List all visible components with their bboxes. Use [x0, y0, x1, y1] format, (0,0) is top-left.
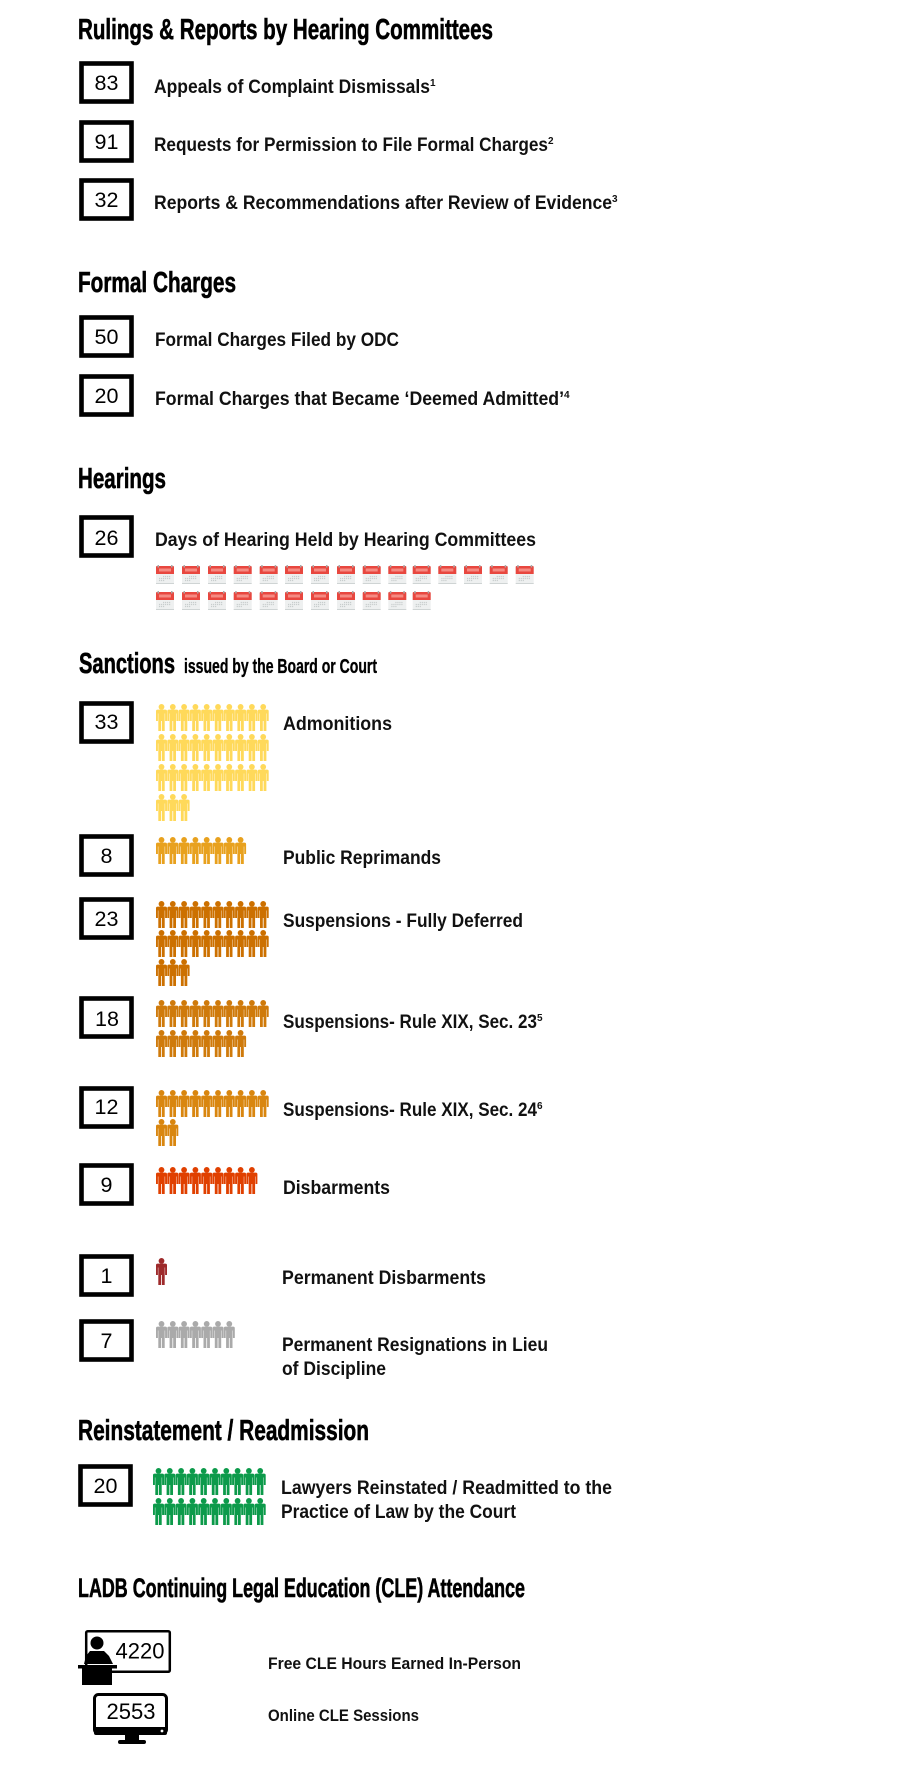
stat: appeals of complaint dismissals	[82, 64, 436, 102]
stat: requests for permission: 2	[548, 136, 554, 147]
stat: permanent disbarments	[82, 1256, 486, 1294]
icons: calendars	[156, 565, 534, 610]
stat: suspensions fully deferred: 23	[95, 907, 118, 931]
stat: admonitions: 33	[95, 710, 118, 734]
stat: appeals of complaint dismissals: 1	[430, 78, 436, 89]
stat: lawyers reinstated: Lawyers Reinstated / Readmitted to the	[281, 1478, 612, 1499]
stat: suspensions rule XIX sec 23: 5	[537, 1013, 543, 1024]
stat: permanent resignations: 7	[101, 1329, 112, 1353]
section: hearings	[78, 463, 536, 610]
stat: suspensions rule XIX sec 23: 18	[95, 1007, 119, 1031]
stat: deemed admitted: Formal Charges that Became ‘Deemed Admitted’	[155, 389, 564, 410]
icons: deferred suspension people	[156, 901, 269, 986]
icons: admonitions people	[156, 704, 269, 821]
stat: online CLE sessions: Online CLE Sessions	[268, 1706, 419, 1725]
stat: disbarments	[82, 1166, 390, 1204]
stat: appeals of complaint dismissals: 83	[95, 71, 118, 95]
icons: sec 23 people	[156, 1000, 269, 1057]
icons: sec 24 people	[156, 1090, 269, 1146]
stat: appeals of complaint dismissals: Appeals of Complaint Dismissals	[154, 77, 430, 98]
stat: public reprimands	[82, 836, 441, 874]
stat: requests for permission	[82, 122, 554, 160]
heading: rulings and reports: Rulings & Reports by Hearing Committees	[78, 14, 493, 46]
stat: disbarments: Disbarments	[283, 1178, 390, 1199]
stat: lawyers reinstated	[80, 1466, 612, 1525]
stat: days of hearing: 26	[95, 526, 118, 550]
icon: monitor: 2553	[107, 1699, 155, 1724]
heading: reinstatement: Reinstatement / Readmission	[78, 1415, 369, 1447]
stat: public reprimands: Public Reprimands	[283, 848, 441, 869]
stat: reports and recommendations: 32	[95, 188, 118, 212]
stat: lawyers reinstated: Practice of Law by the Court	[281, 1502, 517, 1523]
icon: speaker at podium with board	[78, 1631, 170, 1685]
stat: in-person CLE hours: Free CLE Hours Earned In-Person	[268, 1654, 521, 1673]
stat: deemed admitted	[82, 376, 570, 414]
stat: permanent disbarments: Permanent Disbarments	[282, 1268, 486, 1289]
section: formal charges	[78, 267, 570, 414]
stat: public reprimands: 8	[101, 844, 113, 868]
stat: reports and recommendations: 3	[612, 194, 618, 205]
stat: lawyers reinstated: 20	[94, 1474, 117, 1498]
stat: formal charges filed: 50	[95, 325, 118, 349]
icons: reprimand people	[156, 837, 246, 864]
stat: suspensions fully deferred: Suspensions - Fully Deferred	[283, 911, 523, 932]
stat: reports and recommendations	[82, 180, 618, 218]
section: reinstatement	[78, 1415, 612, 1525]
stat: online CLE sessions	[94, 1694, 419, 1744]
icons: resignation people	[156, 1321, 235, 1348]
stat: in-person CLE hours	[78, 1631, 521, 1685]
stat: disbarments: 9	[101, 1173, 112, 1197]
icon: monitor	[94, 1694, 167, 1744]
section: rulings and reports	[78, 14, 618, 218]
stat: admonitions: Admonitions	[283, 714, 392, 735]
stat: formal charges filed	[82, 318, 399, 356]
stat: suspensions rule XIX sec 24	[82, 1088, 543, 1146]
heading: hearings: Hearings	[78, 463, 166, 495]
stat: days of hearing: Days of Hearing Held by Hearing Committees	[155, 530, 536, 551]
icons: disbarment people	[156, 1167, 257, 1194]
stat: suspensions rule XIX sec 24: 6	[537, 1101, 543, 1112]
stat: permanent resignations: Permanent Resignations in Lieu	[282, 1335, 548, 1356]
icon: permanent disbarment person	[156, 1258, 167, 1285]
heading: sanctions: issued by the Board or Court	[184, 656, 377, 678]
stat: suspensions rule XIX sec 24: Suspensions- Rule XIX, Sec. 24	[283, 1100, 537, 1121]
heading: sanctions: Sanctions	[79, 648, 175, 680]
stat: suspensions rule XIX sec 23	[82, 998, 543, 1057]
stat: formal charges filed: Formal Charges Filed by ODC	[155, 330, 399, 351]
stat: reports and recommendations: Reports & Recommendations after Review of Evidence	[154, 193, 612, 214]
stat: suspensions fully deferred	[82, 900, 523, 986]
icons: reinstated people	[153, 1468, 266, 1525]
stat: deemed admitted: 20	[95, 384, 118, 408]
heading: formal charges: Formal Charges	[78, 267, 236, 299]
stat: days of hearing	[82, 518, 536, 556]
heading: CLE attendance: LADB Continuing Legal Education (CLE) Attendance	[78, 1573, 525, 1603]
stat: requests for permission: 91	[95, 130, 118, 154]
stat: suspensions rule XIX sec 24: 12	[95, 1095, 118, 1119]
stat: requests for permission: Requests for Permission to File Formal Charges	[154, 135, 548, 156]
stat: admonitions	[82, 704, 392, 821]
section: CLE attendance	[78, 1573, 525, 1744]
section: sanctions	[79, 648, 548, 1380]
stat: permanent resignations	[82, 1321, 548, 1380]
stat: permanent resignations: of Discipline	[282, 1359, 386, 1380]
icon: speaker at podium with board: 4220	[116, 1638, 164, 1664]
heading: sanctions	[79, 648, 377, 680]
stat: suspensions rule XIX sec 23: Suspensions- Rule XIX, Sec. 23	[283, 1012, 537, 1033]
stat: permanent disbarments: 1	[101, 1264, 112, 1288]
stat: deemed admitted: 4	[564, 390, 570, 401]
